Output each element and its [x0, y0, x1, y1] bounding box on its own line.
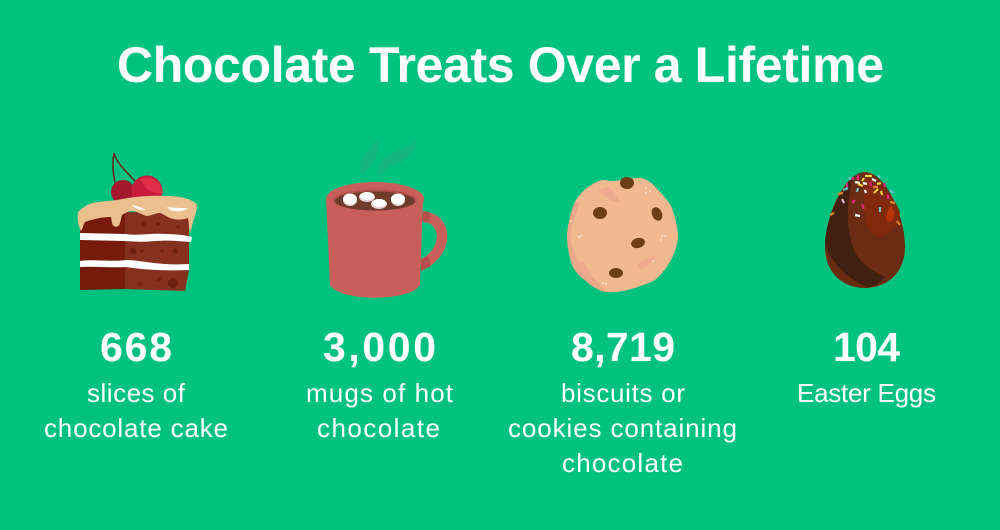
panel: hot chocolate — [306, 138, 454, 443]
label: mugs of hot chocolate — [306, 378, 454, 443]
number: 8,719: 8,719 — [571, 324, 675, 370]
number: 104: 104 — [833, 324, 900, 370]
icon: mug — [326, 182, 442, 298]
icon: steam — [360, 138, 415, 176]
title: Chocolate Treats Over a Lifetime — [117, 37, 884, 93]
number: 668: 668 — [100, 324, 172, 370]
label: Easter Eggs: Easter Eggs — [797, 378, 936, 408]
label: biscuits or cookies containing chocolate — [508, 378, 737, 478]
icon: cake slice — [78, 153, 197, 291]
label: slices of chocolate cake — [44, 378, 228, 443]
label: biscuits or cookies containing chocolate: chocolate — [562, 448, 683, 478]
icon: cookie — [567, 177, 678, 292]
label: slices of chocolate cake: chocolate cake — [44, 413, 228, 443]
label: mugs of hot chocolate: chocolate — [317, 413, 440, 443]
panel: cookie — [508, 177, 737, 478]
label: biscuits or cookies containing chocolate: cookies containing — [508, 413, 737, 443]
label: slices of chocolate cake: slices of — [87, 378, 186, 408]
icon: easter egg — [825, 172, 905, 288]
panel: cake — [44, 153, 228, 443]
label: biscuits or cookies containing chocolate: biscuits or — [561, 378, 685, 408]
label: mugs of hot chocolate: mugs of hot — [306, 378, 454, 408]
panel: easter egg — [797, 172, 936, 408]
number: 3,000: 3,000 — [323, 324, 436, 370]
